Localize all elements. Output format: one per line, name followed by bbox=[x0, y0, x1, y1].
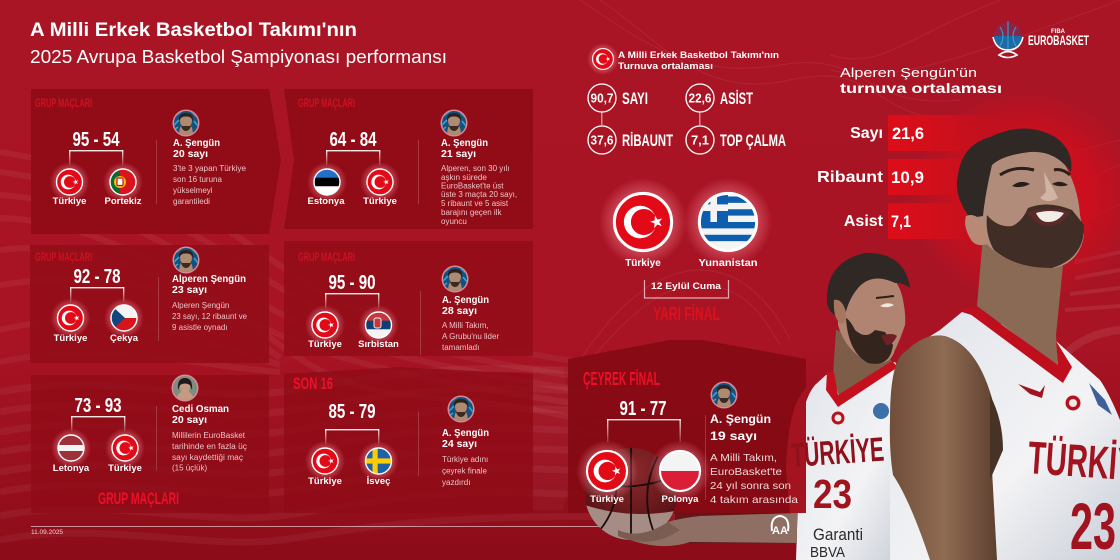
stat bar: Sayı: Sayı bbox=[850, 125, 883, 142]
date: 11.09.2025 bbox=[31, 529, 63, 536]
description: EuroBasket'te bbox=[710, 466, 782, 478]
description: (15 üçlük) bbox=[172, 464, 207, 472]
match date: 12 Eylül Cuma bbox=[651, 281, 722, 292]
description: yükselmeyi bbox=[173, 186, 213, 195]
panel: group match Türkiye - Portekiz bbox=[31, 89, 281, 234]
panel background bbox=[30, 245, 269, 363]
logo: EuroBasket: FIBA bbox=[1051, 29, 1066, 35]
team names bbox=[625, 258, 758, 269]
team names: Türkiye bbox=[625, 258, 661, 269]
team averages heading: Turnuva ortalaması bbox=[618, 61, 713, 72]
team names: Türkiye bbox=[308, 476, 342, 487]
description: EuroBasket'te üst bbox=[441, 182, 504, 190]
description: son 16 turuna bbox=[173, 175, 222, 184]
player photo bbox=[172, 110, 200, 136]
flag: İsveç bbox=[358, 441, 398, 481]
player averages heading: turnuva ortalaması bbox=[840, 80, 1002, 96]
stat: points: 90,7 bbox=[590, 90, 614, 106]
stat: steals bbox=[686, 126, 786, 154]
player stat: 28 sayı bbox=[442, 305, 477, 317]
stat: points: SAYI bbox=[622, 89, 648, 108]
logo: EuroBasket bbox=[993, 21, 1089, 58]
flag: Türkiye bbox=[360, 162, 400, 202]
flag: Türkiye bbox=[305, 305, 345, 345]
glow behind player head bbox=[910, 90, 1120, 300]
flag: Yunanistan bbox=[684, 178, 772, 266]
description: 5 ribaunt ve 5 asist bbox=[441, 199, 509, 208]
description: 4 takım arasında bbox=[710, 494, 798, 506]
flag: Letonya bbox=[51, 428, 91, 468]
description: tamamladı bbox=[442, 343, 479, 352]
small player jersey lettering: 23 bbox=[813, 471, 852, 517]
team names bbox=[308, 339, 399, 350]
flag: Türkiye bbox=[50, 162, 90, 202]
team names: Türkiye bbox=[108, 463, 142, 474]
player photo bbox=[442, 266, 468, 292]
team names bbox=[53, 463, 142, 474]
player stat bbox=[173, 137, 220, 160]
section title: semi final: YARI FİNAL bbox=[653, 304, 720, 324]
description bbox=[442, 455, 488, 487]
description: aşkın sürede bbox=[441, 173, 487, 182]
team names bbox=[308, 476, 390, 487]
description bbox=[172, 431, 247, 472]
stat bar: Ribaunt: Ribaunt bbox=[817, 169, 884, 186]
flag: Portekiz bbox=[103, 162, 143, 202]
description: 24 yıl sonra son bbox=[710, 480, 791, 492]
description: Alperen Şengün bbox=[172, 301, 229, 310]
description: Millilerin EuroBasket bbox=[172, 431, 246, 440]
team names: Türkiye bbox=[53, 196, 86, 207]
flag: Türkiye bbox=[576, 440, 638, 502]
bracket bbox=[71, 416, 125, 431]
agency logo: AA bbox=[772, 525, 788, 537]
bracket bbox=[70, 287, 124, 302]
score: 85 - 79 bbox=[328, 401, 376, 423]
score: 73 - 93 bbox=[74, 395, 122, 417]
player stat: 19 sayı bbox=[710, 429, 757, 443]
team names: Türkiye bbox=[308, 339, 342, 350]
player stat: Alperen Şengün bbox=[172, 273, 246, 285]
panel label: GRUP MAÇLARI bbox=[298, 252, 355, 264]
panel background bbox=[284, 89, 533, 229]
bracket bbox=[69, 150, 123, 165]
score: 91 - 77 bbox=[620, 398, 666, 420]
icon: Turkish flag bbox=[587, 43, 619, 75]
flag: Türkiye bbox=[105, 428, 145, 468]
player stat: A. Şengün bbox=[173, 137, 220, 149]
player photo bbox=[710, 382, 738, 408]
match date bbox=[644, 280, 728, 298]
description: A Milli Takım, bbox=[710, 452, 777, 464]
description: çeyrek finale bbox=[442, 466, 487, 476]
score: 92 - 78 bbox=[74, 266, 120, 288]
stat bar: Asist bbox=[844, 203, 1013, 239]
description: garantiledi bbox=[173, 197, 210, 206]
description: 9 asistle oynadı bbox=[172, 323, 228, 332]
team names: Türkiye bbox=[54, 333, 87, 344]
stat: rebounds: RİBAUNT bbox=[622, 131, 673, 150]
description bbox=[441, 164, 517, 226]
player stat: A. Şengün bbox=[442, 427, 489, 439]
panel background bbox=[284, 367, 533, 513]
player stat: 21 sayı bbox=[441, 148, 476, 160]
stat bar: Ribaunt bbox=[817, 159, 1013, 195]
stat: rebounds bbox=[588, 126, 673, 154]
flag: Estonya bbox=[307, 162, 347, 202]
panel background bbox=[284, 241, 533, 356]
stat: rebounds: 37,6 bbox=[590, 132, 614, 148]
player stat bbox=[710, 412, 771, 443]
basketball and arm bbox=[585, 448, 797, 546]
player stat: 20 sayı bbox=[173, 148, 208, 160]
title: 2025 Avrupa Basketbol Şampiyonası performansı bbox=[30, 47, 447, 67]
player photo bbox=[172, 374, 198, 402]
team averages bbox=[587, 43, 786, 154]
description: 3'te 3 yapan Türkiye bbox=[173, 164, 247, 173]
team names: Sırbistan bbox=[358, 339, 399, 350]
description: A Grubu'nu lider bbox=[442, 332, 499, 341]
team names: Yunanistan bbox=[698, 258, 758, 269]
team averages heading: A Milli Erkek Basketbol Takımı'nın bbox=[618, 50, 779, 61]
stat: assists: ASİST bbox=[720, 89, 753, 108]
team names bbox=[54, 333, 139, 344]
player stat: 24 sayı bbox=[442, 438, 477, 450]
semi final bbox=[599, 178, 772, 324]
player photo bbox=[440, 110, 468, 136]
title: A Milli Erkek Basketbol Takımı'nın bbox=[30, 20, 357, 41]
panel: quarter final bbox=[31, 340, 885, 560]
panel label: GRUP MAÇLARI bbox=[298, 98, 355, 110]
team names bbox=[590, 494, 699, 505]
panel label: GRUP MAÇLARI bbox=[35, 252, 92, 264]
player stat bbox=[172, 273, 246, 296]
player stat: Cedi Osman bbox=[172, 403, 229, 415]
description: Türkiye adını bbox=[442, 455, 488, 464]
stat bar: Sayı: 21,6 bbox=[892, 125, 924, 143]
player averages heading: Alperen Şengün'ün bbox=[840, 66, 977, 80]
panel label: ÇEYREK FİNAL bbox=[583, 369, 660, 389]
panel: group match Türkiye - Sırbistan bbox=[284, 241, 533, 356]
player stat bbox=[172, 403, 229, 426]
flag: Türkiye bbox=[50, 298, 90, 338]
description: üste 3 maçta 20 sayı, bbox=[441, 190, 517, 199]
panel background bbox=[568, 340, 806, 513]
player photo bbox=[448, 396, 474, 422]
description: Alperen, son 30 yılı bbox=[441, 164, 509, 173]
stat: assists: 22,6 bbox=[688, 90, 712, 106]
description bbox=[172, 301, 248, 332]
player averages heading bbox=[840, 66, 1002, 96]
score: 95 - 54 bbox=[72, 129, 120, 151]
bracket bbox=[326, 150, 380, 165]
panel label: GRUP MAÇLARI bbox=[35, 98, 92, 110]
flag: Türkiye bbox=[305, 441, 345, 481]
team names: Çekya bbox=[110, 333, 139, 344]
stat: steals: TOP ÇALMA bbox=[720, 131, 786, 150]
description: tarihinde en fazla üç bbox=[172, 442, 247, 451]
title bbox=[30, 20, 447, 67]
stat bar: Asist: Asist bbox=[844, 213, 884, 230]
stat bar: Sayı bbox=[850, 115, 1013, 151]
player stat: 23 sayı bbox=[172, 284, 207, 296]
bracket bbox=[607, 419, 681, 442]
description: sayı kaydettiği maç bbox=[172, 453, 243, 462]
description: 23 sayı, 12 ribaunt ve bbox=[172, 312, 248, 321]
stat bar: Asist: 7,1 bbox=[891, 213, 911, 231]
player stat: A. Şengün bbox=[441, 137, 488, 149]
flag: Türkiye bbox=[599, 178, 687, 266]
small player photo illustration bbox=[796, 253, 910, 560]
team averages heading bbox=[618, 50, 779, 72]
description bbox=[442, 321, 499, 352]
team names bbox=[308, 196, 397, 207]
team names: Estonya bbox=[308, 196, 345, 207]
panel: group match Letonya - Türkiye bbox=[31, 374, 269, 513]
player stat: A. Şengün bbox=[442, 294, 489, 306]
description: barajını geçen ilk bbox=[441, 208, 502, 217]
player stat bbox=[441, 137, 488, 160]
agency logo bbox=[772, 516, 788, 537]
stat bar: Ribaunt: 10,9 bbox=[891, 169, 924, 187]
panel: group match Estonya - Türkiye bbox=[284, 89, 533, 229]
team names: Letonya bbox=[53, 463, 90, 474]
description: yazdırdı bbox=[442, 478, 470, 487]
team names: Polonya bbox=[662, 494, 699, 505]
description bbox=[710, 452, 798, 506]
large player photo illustration bbox=[890, 128, 1120, 560]
small player jersey lettering: Garanti bbox=[813, 525, 863, 544]
shaded strip below panel bbox=[675, 513, 797, 543]
team names: Türkiye bbox=[363, 196, 397, 207]
player stat: A. Şengün bbox=[710, 412, 771, 426]
flag: Sırbistan bbox=[358, 305, 398, 345]
team names: İsveç bbox=[367, 476, 390, 487]
bracket bbox=[325, 429, 379, 444]
flag: Polonya bbox=[649, 440, 711, 502]
small player jersey lettering: TÜRKİYE bbox=[790, 431, 885, 475]
description: oyuncu bbox=[441, 217, 467, 226]
stat: points bbox=[588, 84, 648, 112]
player sleeve through panel bbox=[786, 388, 806, 513]
player stat bbox=[442, 427, 489, 450]
panel background bbox=[31, 375, 269, 513]
score: 64 - 84 bbox=[330, 129, 377, 151]
panel label: SON 16 bbox=[293, 374, 333, 393]
stat: assists bbox=[686, 84, 753, 112]
team names: Türkiye bbox=[590, 494, 624, 505]
flag: Çekya bbox=[104, 298, 144, 338]
date line bbox=[31, 526, 771, 527]
panel background bbox=[31, 89, 281, 234]
stat: steals: 7,1 bbox=[691, 132, 709, 148]
description bbox=[173, 164, 247, 206]
score: 95 - 90 bbox=[328, 272, 376, 294]
player stat: 20 sayı bbox=[172, 414, 207, 426]
bracket bbox=[325, 293, 379, 308]
small player jersey lettering bbox=[790, 431, 885, 560]
team names bbox=[53, 196, 142, 207]
team names: Portekiz bbox=[105, 196, 142, 207]
player photo bbox=[172, 246, 200, 274]
panel: group match Türkiye - Çekya bbox=[30, 245, 269, 363]
description: A Milli Takım, bbox=[442, 321, 489, 330]
section title: group matches: GRUP MAÇLARI bbox=[98, 489, 179, 508]
player stat bbox=[442, 294, 489, 317]
panel: round of 16 Türkiye - İsveç bbox=[284, 367, 533, 513]
